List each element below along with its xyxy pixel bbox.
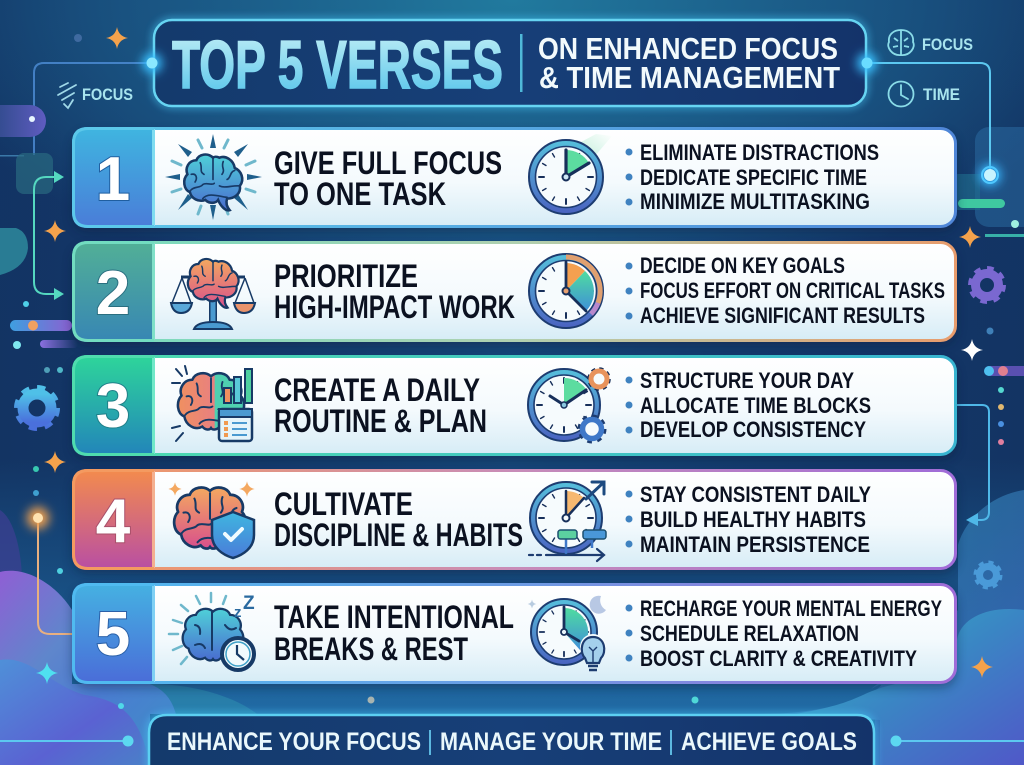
left stars (36, 27, 128, 684)
icon: blue gear (976, 562, 1000, 588)
heading 3: CREATE A DAILY (274, 372, 480, 408)
bullets 4: BUILD HEALTHY HABITS (640, 507, 866, 532)
bullets 5: BOOST CLARITY & CREATIVITY (640, 646, 917, 671)
heading 3: ROUTINE & PLAN (274, 403, 487, 439)
heading 3 (274, 372, 487, 439)
icon: brain on balance scale (171, 259, 255, 329)
icon: brain with chart and planner (172, 366, 252, 441)
bullets 4: MAINTAIN PERSISTENCE (640, 532, 870, 557)
number badge 2 (72, 241, 155, 342)
left focus label (58, 83, 133, 108)
card 5 (72, 583, 957, 688)
number badge 4 (72, 469, 155, 570)
bullets 3 (626, 368, 871, 442)
heading 5: TAKE INTENTIONAL (274, 599, 514, 635)
heading 5 (274, 599, 514, 667)
bullets 2: ACHIEVE SIGNIFICANT RESULTS (640, 303, 925, 328)
right legend: focus (888, 30, 973, 55)
heading 5: BREAKS & REST (274, 631, 468, 667)
header panel (142, 20, 877, 106)
icon: resting brain with clock: Z (243, 593, 255, 614)
footer text (167, 728, 857, 756)
card 4 (72, 469, 957, 574)
number badge 3: 3 (96, 372, 130, 441)
number badge 5: 5 (96, 600, 130, 669)
heading 2: PRIORITIZE (274, 258, 418, 294)
bullets 3: DEVELOP CONSISTENCY (640, 417, 866, 442)
bullets 4 (626, 482, 871, 557)
bullets 1: ELIMINATE DISTRACTIONS (640, 140, 879, 165)
footer text: ACHIEVE GOALS (681, 728, 857, 756)
number badge 3 (72, 355, 155, 456)
heading 1 (274, 145, 502, 212)
icon: clock with light bulb and moon (528, 596, 606, 670)
card 1 (72, 127, 957, 232)
left connectors and decorations (0, 34, 698, 746)
bullets 4: STAY CONSISTENT DAILY (640, 482, 871, 507)
footer text: ENHANCE YOUR FOCUS (167, 728, 421, 756)
right legend: time: TIME (923, 85, 960, 104)
bullets 1: MINIMIZE MULTITASKING (640, 189, 870, 214)
card 2 (72, 241, 957, 346)
subtitle: & TIME MANAGEMENT (539, 60, 840, 95)
right connectors and decorations (867, 63, 1024, 746)
icon: segmented clock (529, 254, 603, 328)
heading 4: CULTIVATE (274, 486, 413, 522)
bullets 3: STRUCTURE YOUR DAY (640, 368, 854, 393)
number badge 2: 2 (96, 259, 130, 328)
heading 1: GIVE FULL FOCUS (274, 145, 502, 181)
right legend: focus: FOCUS (922, 35, 973, 54)
footer banner (149, 715, 874, 765)
icon: resting brain with clock (169, 593, 255, 670)
subtitle (538, 31, 840, 95)
number badge 1: 1 (96, 145, 130, 214)
bullets 5: RECHARGE YOUR MENTAL ENERGY (640, 596, 942, 621)
heading 2 (274, 258, 515, 325)
bullets 1 (626, 140, 879, 214)
heading 2: HIGH-IMPACT WORK (274, 289, 515, 325)
icon: left gear (17, 388, 57, 428)
bullets 1: DEDICATE SPECIFIC TIME (640, 165, 867, 190)
right stars (959, 226, 993, 678)
icon: brain with shield (168, 481, 255, 558)
heading 1: TO ONE TASK (274, 176, 446, 212)
heading 4: DISCIPLINE & HABITS (274, 517, 523, 553)
icon: clock with habit tracker (529, 482, 606, 561)
number badge 4: 4 (96, 487, 131, 556)
icon: resting brain with clock: z (234, 604, 242, 621)
icon: brain with rays (165, 134, 262, 220)
subtitle: ON ENHANCED FOCUS (538, 31, 838, 66)
bullets 5 (626, 596, 942, 671)
icon: clock with gears (528, 369, 609, 442)
number badge 5 (72, 583, 155, 684)
number badge 1 (72, 127, 155, 228)
card 3 (72, 355, 957, 460)
bullets 3: ALLOCATE TIME BLOCKS (640, 393, 871, 418)
right legend: time (888, 82, 960, 106)
bullets 2: DECIDE ON KEY GOALS (640, 253, 845, 278)
title: TOP 5 VERSES (172, 27, 503, 103)
bullets 5: SCHEDULE RELAXATION (640, 621, 859, 646)
footer text: MANAGE YOUR TIME (440, 728, 662, 756)
heading 4 (274, 486, 523, 553)
bullets 2 (626, 253, 945, 328)
left focus label: FOCUS (82, 85, 133, 104)
icon: purple gear (970, 268, 1004, 302)
icon: clock with focus wedge (529, 134, 612, 214)
